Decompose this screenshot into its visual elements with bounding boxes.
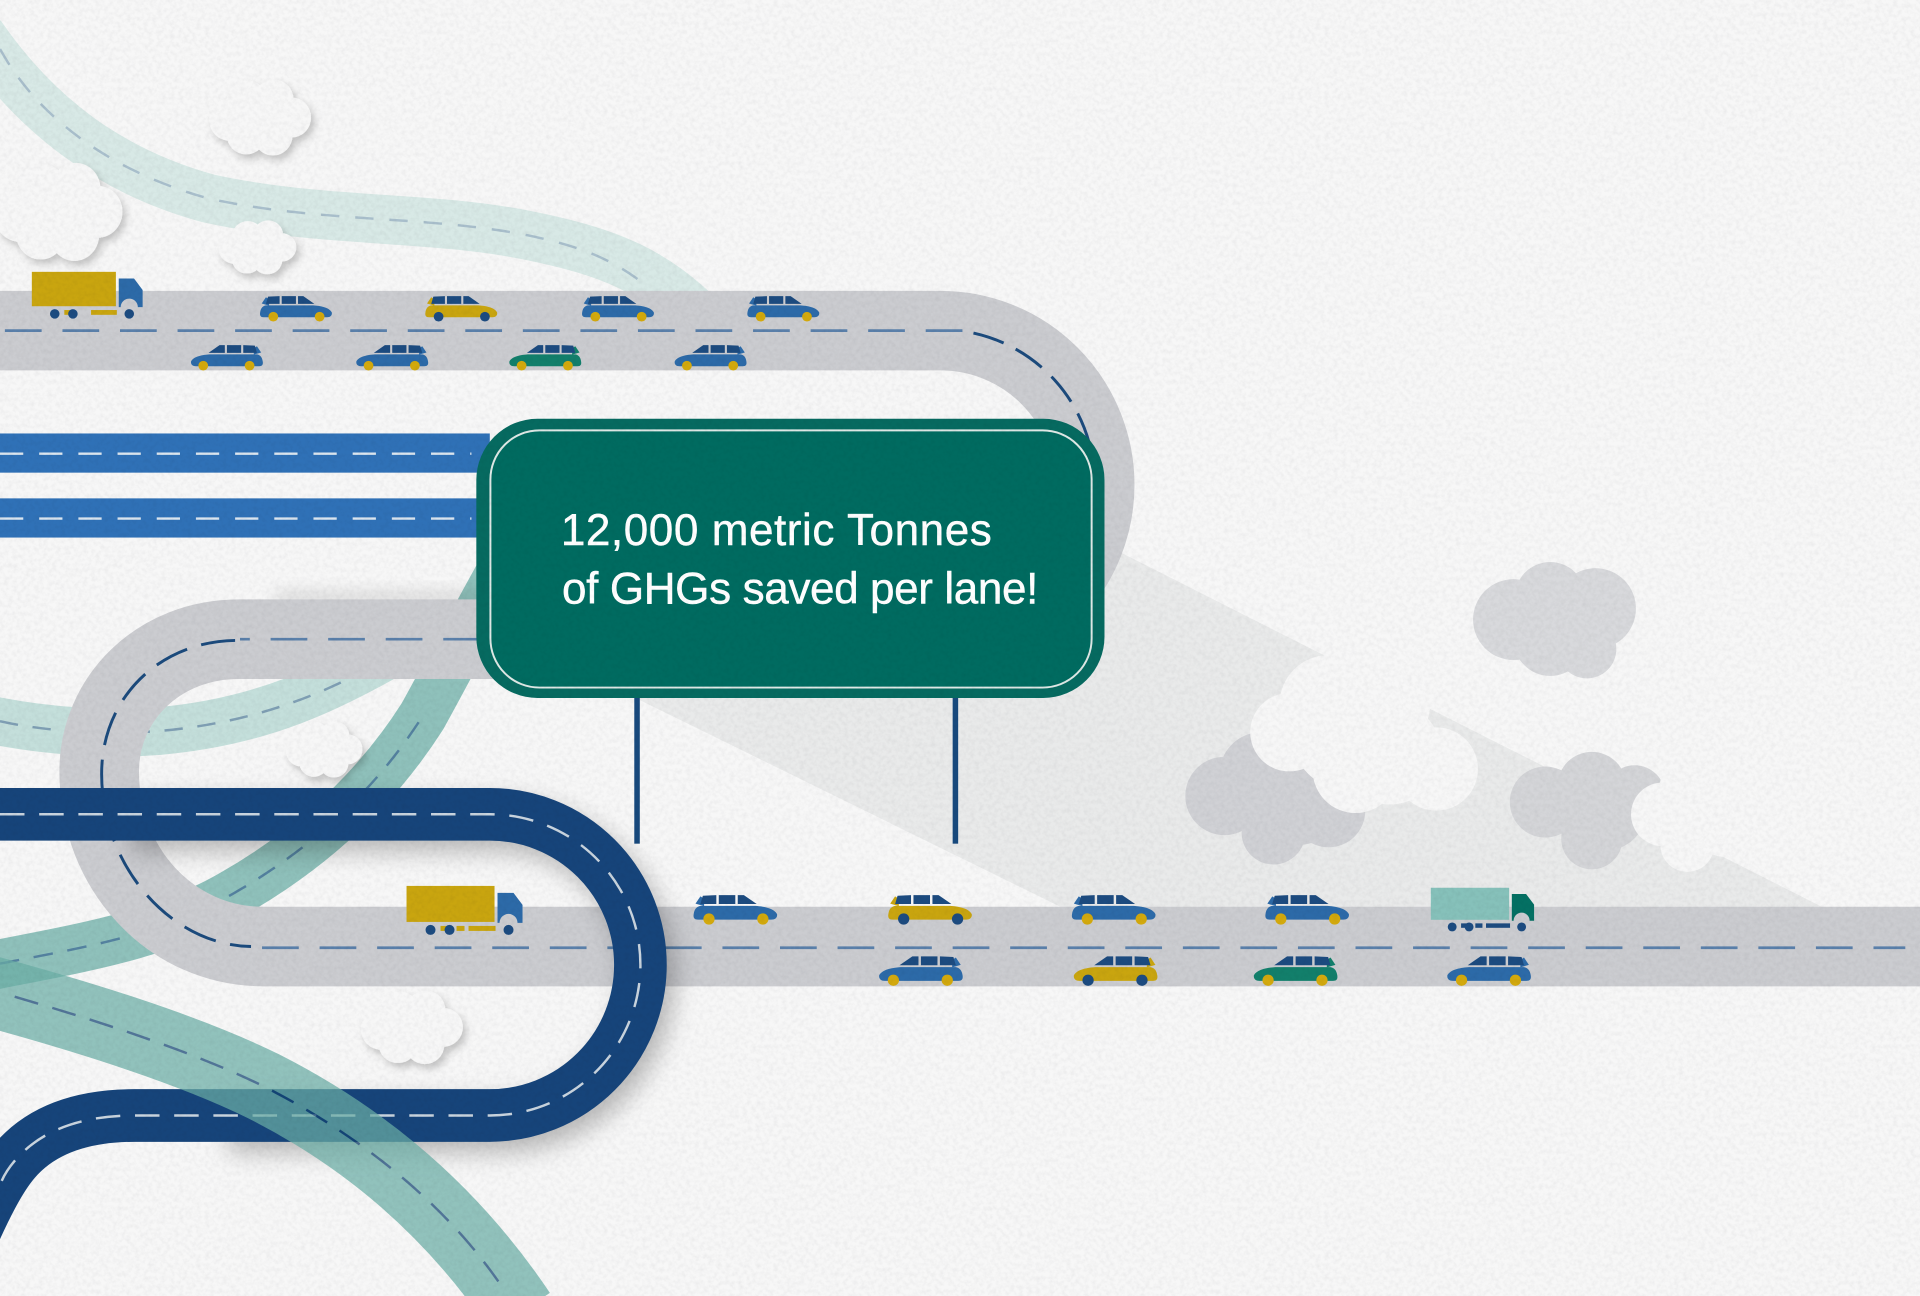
top lane dashes [5,330,967,332]
cars top road lower lane [191,345,747,371]
cloud 4 [286,721,362,778]
highway sign [476,419,1104,698]
shadow of grey road upper bend [276,593,484,605]
sign text line 1: 12,000 metric Tonnes [561,506,992,555]
navy road [0,814,640,1251]
car [582,296,654,322]
road: pale teal middle road [0,631,429,733]
navy road shadow [131,825,649,1127]
grey cloud right [1510,752,1665,869]
car [260,296,332,322]
cloud 3 [219,220,296,274]
cars bottom road lower lane [879,956,1531,986]
road: teal lower road [0,989,520,1296]
road: pale teal upper road [0,34,704,321]
car [1074,956,1157,986]
car [1447,956,1531,986]
truck centre gold [407,886,523,935]
white cloud right [1631,753,1763,872]
grey road [0,331,1920,948]
truck right teal [1431,888,1534,931]
top bend dashes [973,333,1095,485]
white cloud middle [1250,655,1478,813]
blue road lower [0,498,490,538]
car [879,956,963,986]
car [888,895,972,925]
cars top road upper lane [260,296,819,322]
pale clouds top-left [0,80,311,274]
car [1265,895,1349,925]
grey cloud middle [1185,732,1365,864]
car [694,895,777,925]
cloud 2 [0,163,122,261]
cloud 5 [361,991,463,1064]
sign post right [953,696,958,844]
car [356,345,428,371]
cars bottom road upper lane [694,895,1349,925]
road: teal rising road [0,527,527,967]
upper return dashes [240,638,480,640]
car [1254,956,1337,986]
car [191,345,263,371]
car [675,345,747,371]
car [509,345,581,371]
car [747,296,819,322]
long shadow from sign [636,540,1903,948]
grey cloud upper right [1473,562,1636,678]
car [425,296,497,322]
sign post left [634,696,640,844]
bottom lane dashes [262,947,1905,949]
left bend dashes [102,640,251,947]
cloud 1 [209,80,311,156]
car [1072,895,1155,925]
truck top-left gold [32,272,143,319]
sign text line 2: of GHGs saved per lane! [562,565,1038,614]
blue road upper [0,433,490,473]
